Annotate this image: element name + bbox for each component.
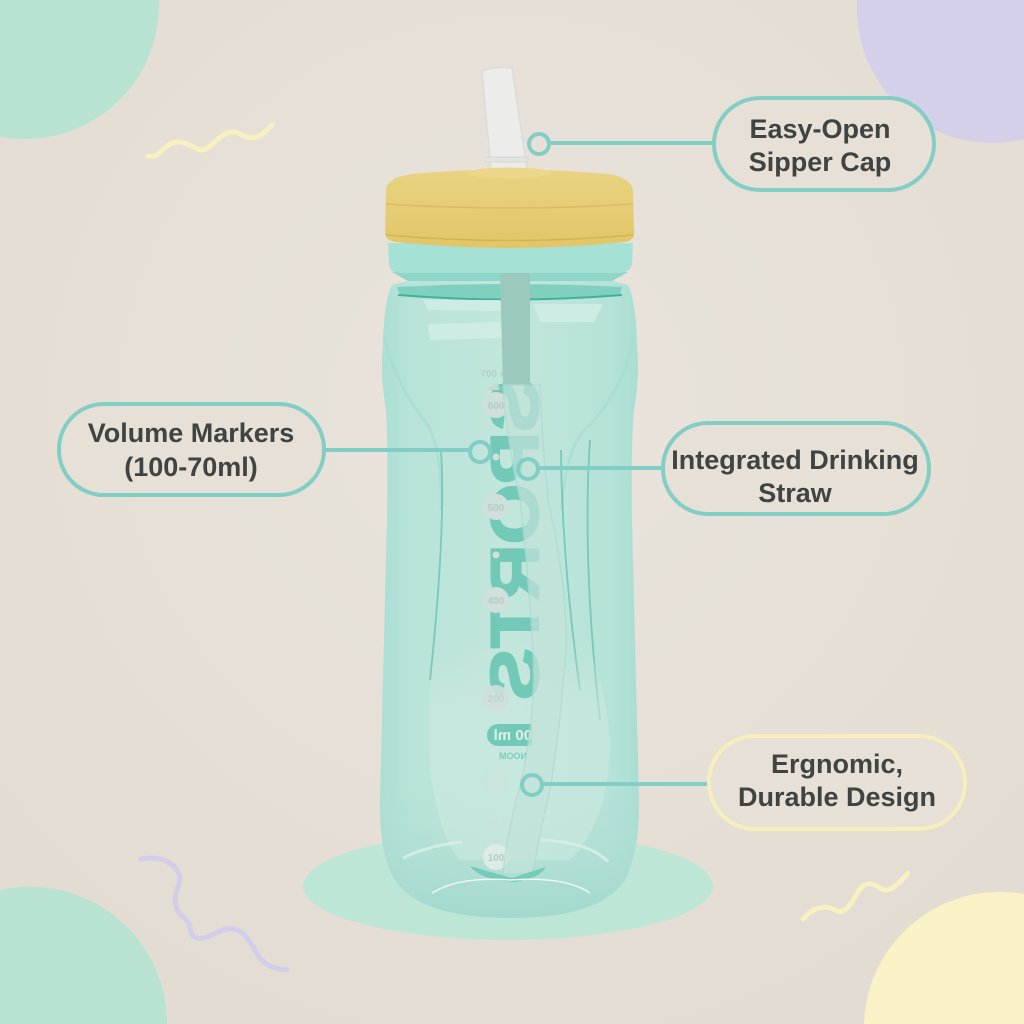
ridges dark <box>430 440 600 720</box>
inner base highlights <box>403 840 608 862</box>
shoulder line <box>398 295 622 300</box>
callout: Volume Markers <box>59 404 490 495</box>
corner circle: mint top left <box>0 0 159 139</box>
volume marker dots: 100 <box>488 853 505 864</box>
cap <box>385 170 634 248</box>
base ellipse <box>303 832 713 940</box>
volume mark 700ml <box>480 369 512 390</box>
straw base fitting <box>470 866 546 882</box>
callout: Ergonomic Durable Design: Durable Design <box>738 782 936 812</box>
base ellipse highlight <box>432 879 590 893</box>
volume marker dots: 600 <box>488 401 505 412</box>
inner straw upper <box>500 272 530 385</box>
callout: Ergonomic Durable Design: Ergnomic, <box>771 749 903 779</box>
shoulder band <box>397 284 622 298</box>
squiggle: yellow bottom right <box>803 873 908 919</box>
volume marker dots: 400 <box>488 596 505 607</box>
cap ring <box>388 243 633 273</box>
callout: Volume Markers: Volume Markers <box>88 418 294 448</box>
squiggle: lavender bottom left <box>141 858 287 970</box>
callout: Integrated Drinking Straw <box>518 423 929 514</box>
callout: Integrated Drinking Straw: Integrated Drinking <box>671 445 919 475</box>
volume marker dots: 200 <box>488 694 505 705</box>
neck rim <box>392 272 628 281</box>
bottle base shading <box>380 780 639 918</box>
volume marker dots: 500 <box>488 503 505 514</box>
volume mark 700ml: 700 ml <box>480 369 512 380</box>
straw tip <box>482 67 527 170</box>
ridges right <box>562 335 634 510</box>
straw collar <box>485 157 528 162</box>
cap sipper recess <box>467 168 551 178</box>
cap lower groove <box>386 235 633 240</box>
callout: Easy-Open Sipper Cap: Easy-Open <box>749 114 891 144</box>
squiggle: yellow top left <box>148 125 272 157</box>
callout: Volume Markers: (100-70ml) <box>124 452 258 482</box>
neck highlights <box>423 300 603 340</box>
cap groove <box>386 204 633 208</box>
callout: Ergonomic Durable Design <box>522 736 965 829</box>
corner circle: mint bottom left <box>0 887 167 1024</box>
capacity badge: 00 ml <box>494 727 532 744</box>
corner circle: lavender top right <box>857 0 1024 143</box>
inner straw tube <box>503 385 566 874</box>
capacity badge <box>487 724 532 761</box>
callout: Easy-Open Sipper Cap: Sipper Cap <box>749 147 891 177</box>
callout: Easy-Open Sipper Cap <box>529 98 934 190</box>
inner panel light <box>429 640 610 860</box>
callout: Integrated Drinking Straw: Straw <box>758 478 833 508</box>
bottle <box>380 67 639 918</box>
bottle body <box>380 272 639 918</box>
volume marker dots <box>483 392 509 870</box>
corner circle: yellow bottom right <box>864 892 1024 1024</box>
ridges left <box>384 335 441 510</box>
printed word: SPORTS <box>477 380 553 700</box>
capacity badge: NOOM <box>499 751 527 761</box>
